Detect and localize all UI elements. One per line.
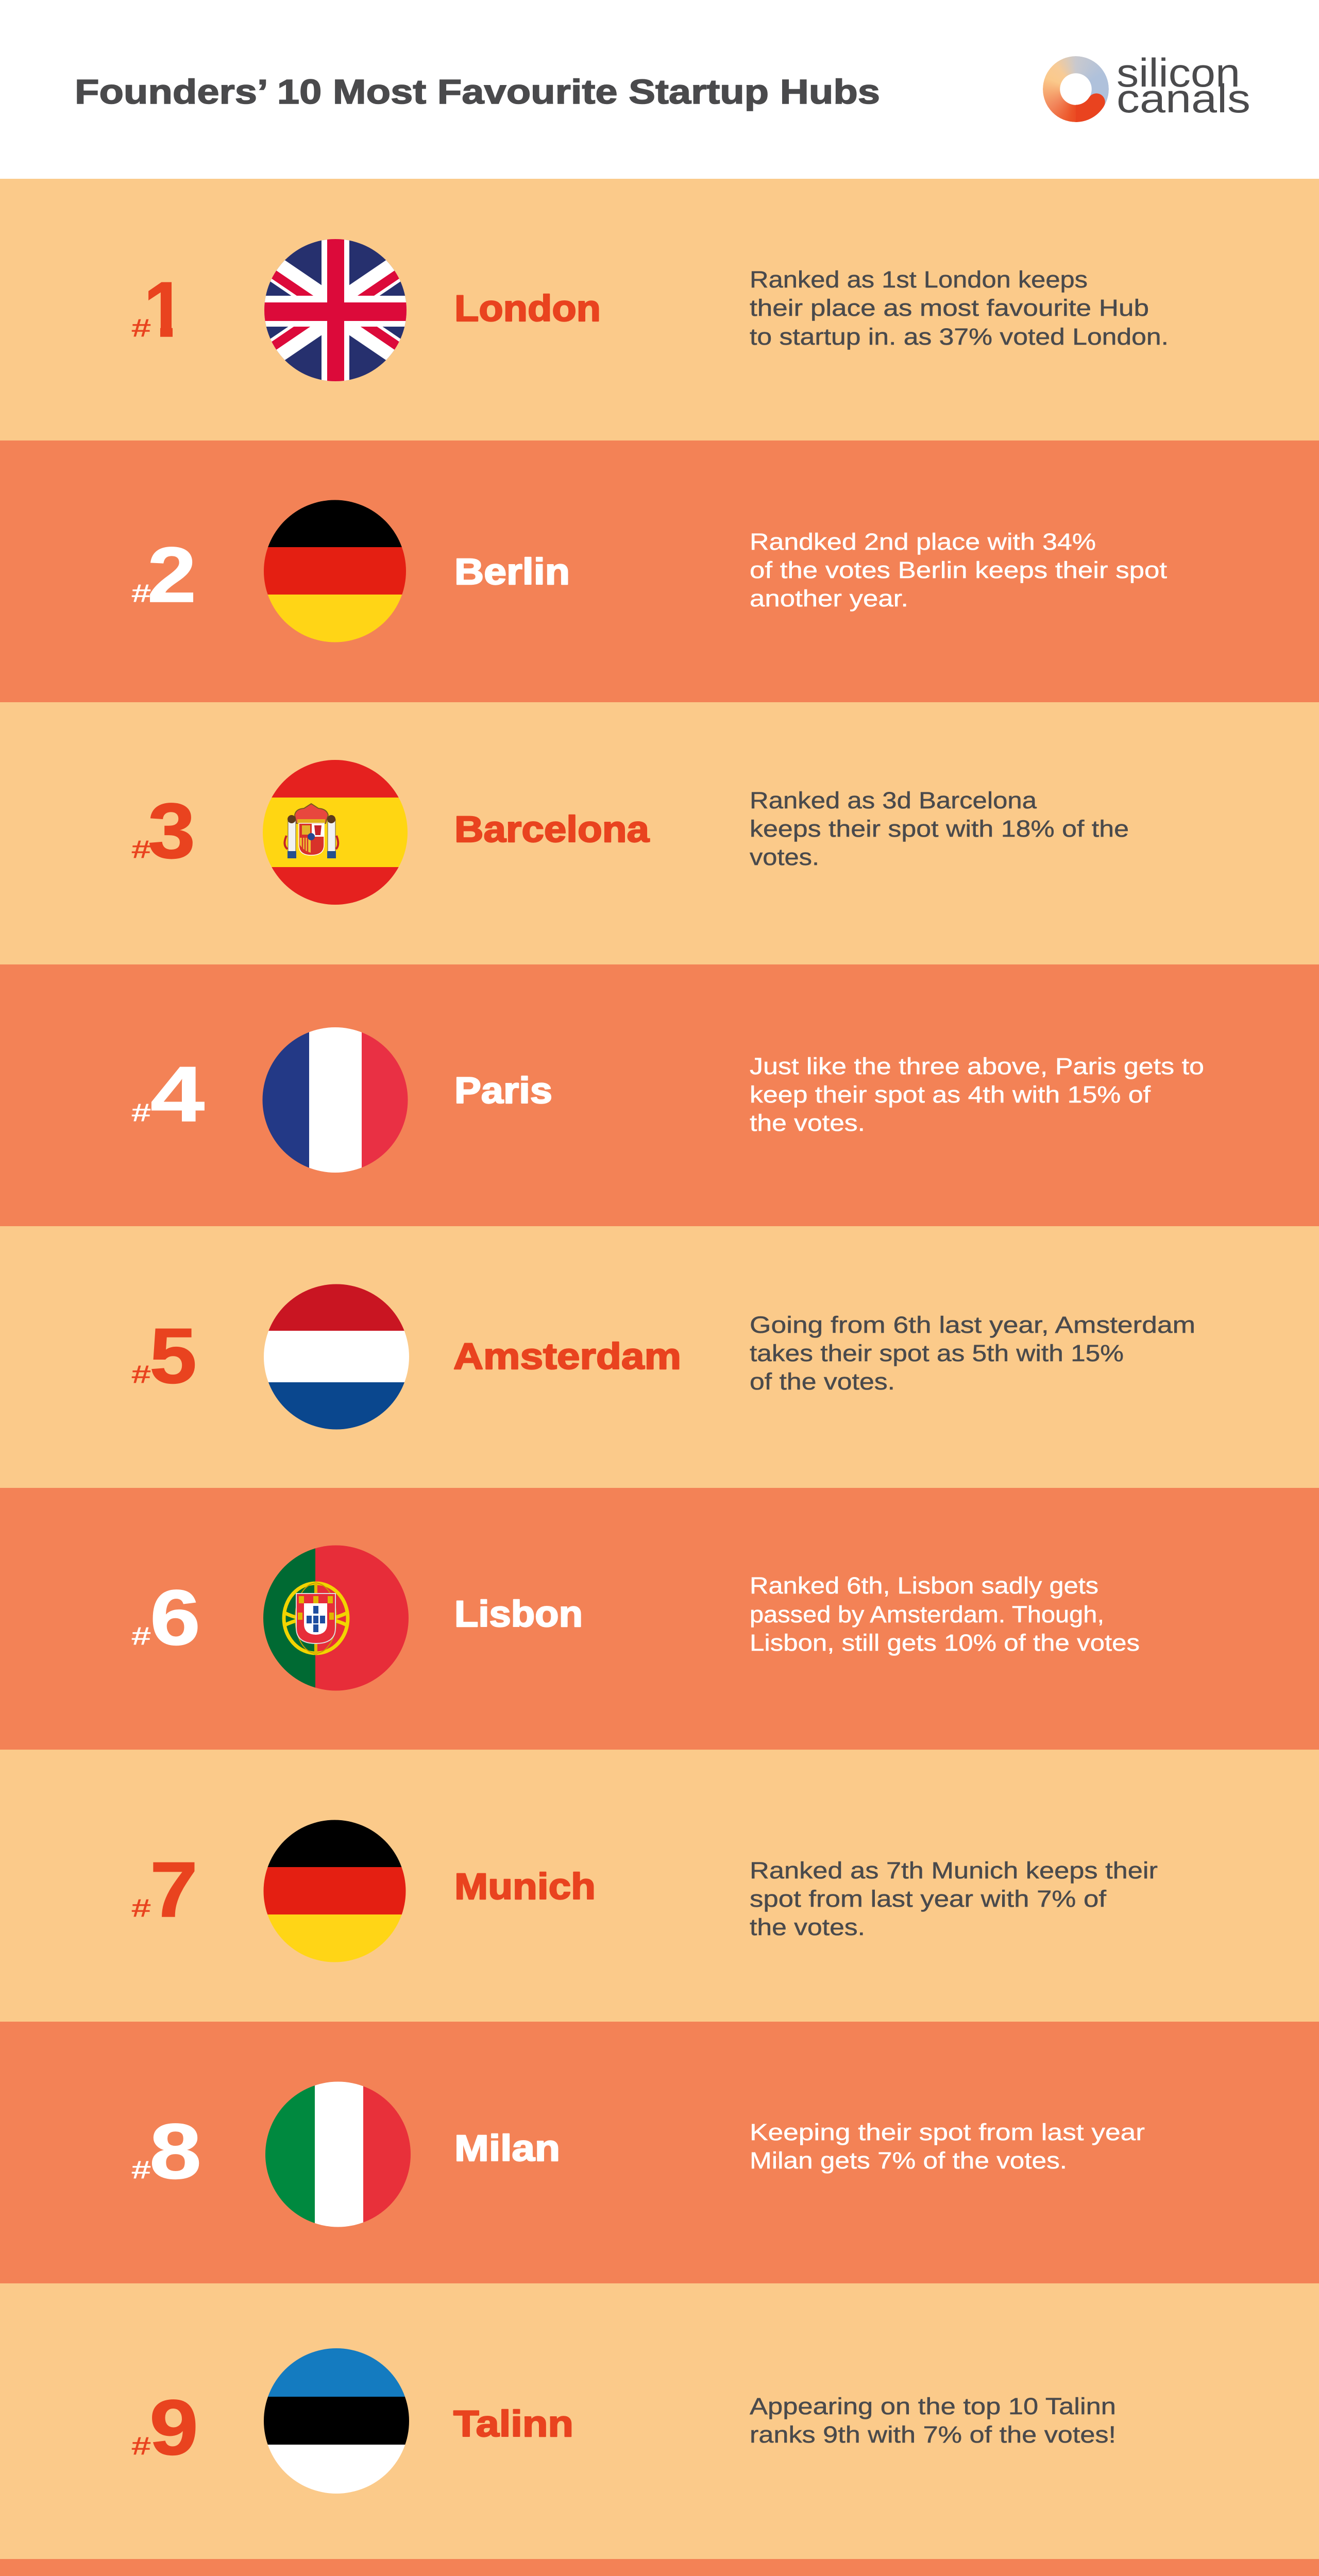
description: Keeping their spot from last year [750, 2119, 1145, 2145]
city name: Milan [454, 2128, 560, 2169]
rank 9: # [132, 2433, 150, 2460]
band 2 [0, 440, 1319, 702]
description: keeps their spot with 18% of the [750, 816, 1129, 842]
rank 6: # [132, 1623, 150, 1650]
city name: Amsterdam [453, 1336, 681, 1377]
description: votes. [750, 844, 819, 870]
description: spot from last year with 7% of [750, 1886, 1107, 1912]
rank 7: 7 [150, 1846, 198, 1934]
description: Milan gets 7% of the votes. [750, 2147, 1067, 2174]
description: another year. [750, 585, 908, 612]
rank 1: # [132, 315, 150, 342]
row 6: Lisbon [0, 1488, 1319, 1750]
rank 4: 4 [150, 1050, 205, 1138]
city name: Paris [454, 1071, 552, 1111]
coat of arms [284, 1582, 348, 1655]
description [750, 2393, 1116, 2448]
rank 1 [132, 282, 173, 337]
band 3 [0, 702, 1319, 964]
rank 3: 3 [148, 787, 195, 875]
description: passed by Amsterdam. Though, [750, 1601, 1104, 1628]
band 10 [0, 2559, 1319, 2576]
band 9 [0, 2283, 1319, 2559]
row 8: Milan [0, 2022, 1319, 2283]
description: Ranked 6th, Lisbon sadly gets [750, 1572, 1098, 1599]
description: Going from 6th last year, Amsterdam [750, 1312, 1195, 1338]
row 5: Amsterdam [0, 1226, 1319, 1488]
flag: Germany [264, 500, 406, 642]
rank 5: 5 [149, 1312, 197, 1400]
row 10: Stockholm [0, 2559, 1319, 2576]
description [750, 1572, 1140, 1656]
flag: Estonia [258, 2344, 412, 2496]
city name: London [454, 289, 601, 329]
city name: Barcelona [454, 809, 650, 850]
flag: Spain [258, 757, 412, 907]
description [750, 529, 1168, 612]
flag: Italy [260, 2079, 415, 2231]
band 8 [0, 2022, 1319, 2283]
rank 9: 9 [149, 2384, 198, 2471]
description [750, 1312, 1195, 1395]
description: of the votes. [750, 1368, 895, 1395]
description [750, 787, 1129, 870]
description: Lisbon, still gets 10% of the votes [750, 1630, 1140, 1656]
band 7 [0, 1750, 1319, 2022]
row 7: Munich [0, 1750, 1319, 2022]
rank 1: 1 [144, 266, 185, 353]
description: to startup in. as 37% voted London. [750, 324, 1169, 350]
rank 2: 2 [147, 531, 196, 619]
city name: Munich [454, 1867, 596, 1907]
description: Ranked as 1st London keeps [750, 266, 1088, 293]
rank 4: # [132, 1099, 150, 1127]
flag: Netherlands [258, 1283, 412, 1431]
flag: France [258, 1025, 413, 1175]
logo hook and wordmark: canals [1117, 76, 1250, 121]
rank 3 [132, 787, 195, 875]
rank 3: # [132, 836, 150, 863]
rank 6 [132, 1574, 200, 1662]
band 6 [0, 1488, 1319, 1750]
description: Ranked as 7th Munich keeps their [750, 1857, 1158, 1884]
row 1: London [0, 179, 1319, 440]
rank 7: # [132, 1895, 150, 1922]
description [750, 2119, 1145, 2174]
rank 8: # [132, 2157, 150, 2184]
rank 8 [132, 2108, 201, 2195]
row 9: Talinn [0, 2283, 1319, 2559]
description: Appearing on the top 10 Talinn [750, 2393, 1116, 2419]
row 4: Paris [0, 964, 1319, 1226]
band 1 [0, 179, 1319, 440]
description: Ranked as 3d Barcelona [750, 787, 1037, 814]
rank 2: # [132, 580, 150, 607]
description: ranks 9th with 7% of the votes! [750, 2421, 1116, 2448]
coat of arms [284, 804, 338, 858]
description: the votes. [750, 1110, 865, 1136]
rank 8: 8 [149, 2108, 201, 2195]
logo: Silicon Canals [1043, 54, 1250, 122]
description: the votes. [750, 1914, 865, 1940]
rank 5: # [132, 1361, 150, 1388]
flag: Germany [258, 1816, 412, 1965]
flag: United Kingdom [264, 239, 407, 381]
description: keep their spot as 4th with 15% of [750, 1081, 1151, 1108]
row 2: Berlin [0, 440, 1319, 702]
description: takes their spot as 5th with 15% [750, 1340, 1124, 1366]
city name: Talinn [453, 2404, 573, 2445]
rank 5 [132, 1312, 197, 1400]
rank 4 [132, 1050, 205, 1138]
rank 2 [132, 531, 196, 619]
logo hook and wordmark [1076, 54, 1250, 122]
logo ring [1043, 56, 1109, 122]
description: Just like the three above, Paris gets to [750, 1053, 1204, 1079]
description: their place as most favourite Hub [750, 295, 1149, 321]
description [750, 1857, 1158, 1940]
city name: Berlin [454, 552, 570, 592]
rank 7 [132, 1846, 198, 1934]
band 5 [0, 1226, 1319, 1488]
title: Founders’ 10 Most Favourite Startup Hubs [75, 73, 880, 111]
row 3: Barcelona [0, 702, 1319, 964]
city name: Lisbon [454, 1594, 583, 1635]
rank 9 [132, 2384, 198, 2471]
flag: Portugal [260, 1543, 413, 1692]
description [750, 1053, 1204, 1136]
description: of the votes Berlin keeps their spot [750, 557, 1168, 583]
rank 6: 6 [150, 1574, 200, 1662]
description [750, 266, 1169, 350]
description: Randked 2nd place with 34% [750, 529, 1096, 555]
band 4 [0, 964, 1319, 1226]
